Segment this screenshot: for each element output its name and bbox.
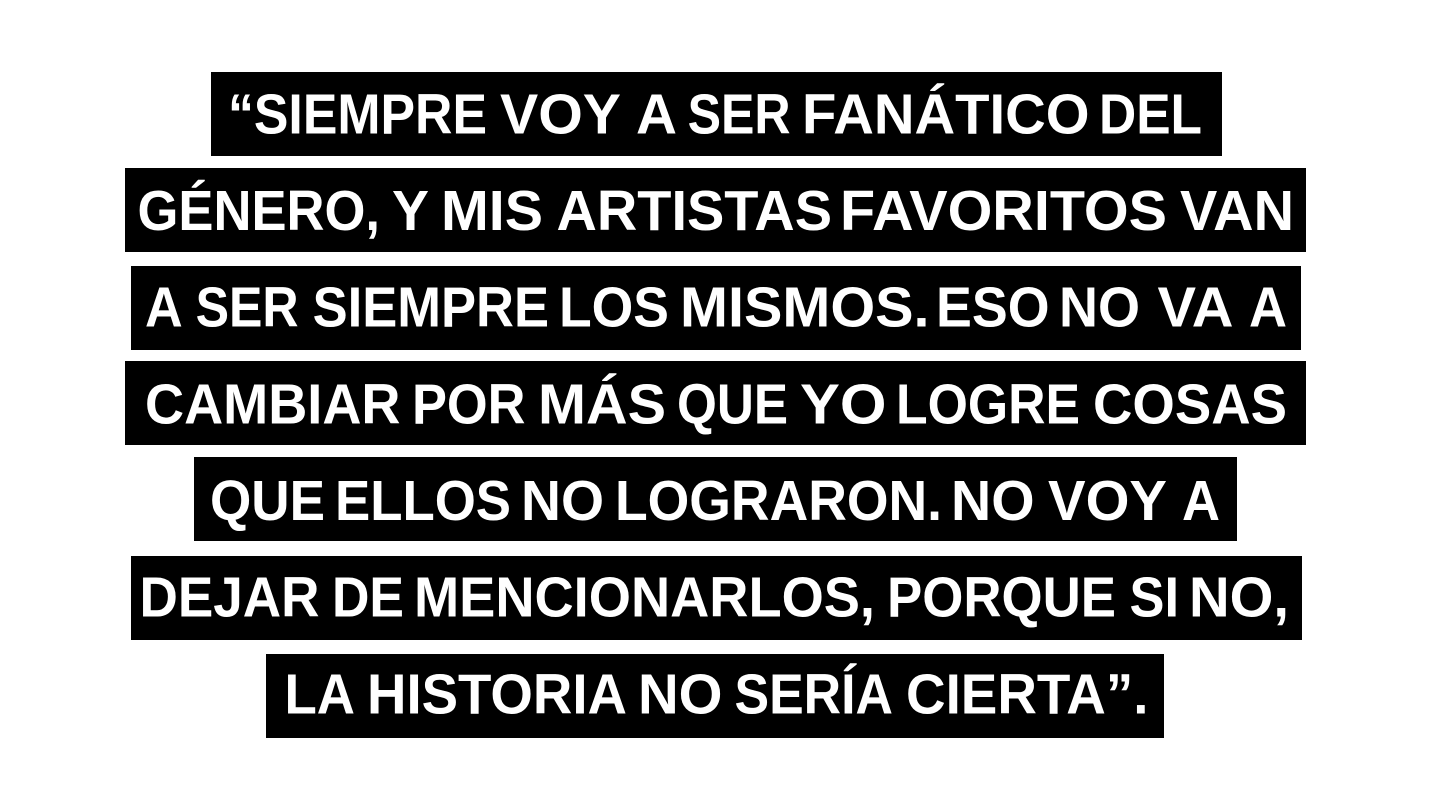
- quote line 6: PORQUE: [887, 566, 1116, 629]
- quote line 4: CAMBIAR: [145, 372, 400, 435]
- quote line 3: NO: [1059, 276, 1140, 339]
- quote line 3: LOS: [559, 276, 669, 339]
- quote line 2: Y: [392, 179, 429, 242]
- quote line 2: FAVORITOS: [840, 179, 1167, 242]
- quote line 7: HISTORIA: [367, 662, 627, 725]
- quote line 7: [266, 654, 1164, 738]
- quote line 6: NO,: [1189, 566, 1289, 629]
- quote line 3: SER: [196, 276, 299, 339]
- quote line 7: NO: [638, 662, 722, 725]
- quote line 7: CIERTA”.: [906, 662, 1148, 725]
- quote line 4: MÁS: [538, 372, 666, 435]
- quote line 3: VA: [1158, 276, 1234, 339]
- quote line 7: LA: [284, 662, 355, 725]
- quote line 4: COSAS: [1093, 372, 1287, 435]
- quote line 3: SIEMPRE: [313, 276, 549, 339]
- quote line 1: DEL: [1099, 82, 1202, 145]
- quote line 2: MIS: [441, 179, 543, 242]
- quote line 5: LOGRARON.: [615, 469, 942, 532]
- quote line 4: YO: [800, 372, 886, 435]
- quote line 5: NO: [521, 469, 604, 532]
- quote line 1: FANÁTICO: [802, 82, 1090, 145]
- quote line 4: LOGRE: [896, 372, 1080, 435]
- quote line 4: QUE: [677, 372, 788, 435]
- quote line 5: QUE: [210, 469, 325, 532]
- quote line 5: A: [1182, 469, 1220, 532]
- quote line 3: [131, 266, 1301, 350]
- quote line 4: POR: [412, 372, 526, 435]
- quote line 7: SERÍA: [734, 662, 893, 725]
- quote line 5: VOY: [1048, 469, 1167, 532]
- quote line 3: A: [1249, 276, 1287, 339]
- quote line 6: DE: [332, 566, 404, 629]
- quote line 5: [194, 457, 1237, 541]
- quote line 2: ARTISTAS: [556, 179, 832, 242]
- quote line 6: MENCIONARLOS,: [414, 566, 875, 629]
- quote line 5: ELLOS: [335, 469, 511, 532]
- quote line 4: [125, 361, 1306, 445]
- quote line 3: ESO: [936, 276, 1050, 339]
- quote line 2: GÉNERO,: [138, 179, 380, 242]
- quote line 2: [125, 168, 1306, 252]
- quote line 6: SI: [1130, 566, 1179, 629]
- quote line 1: A: [636, 82, 677, 145]
- quote line 2: VAN: [1180, 179, 1294, 242]
- quote line 3: MISMOS.: [680, 276, 930, 339]
- quote line 1: “SIEMPRE: [228, 82, 487, 145]
- quote line 6: [131, 556, 1302, 640]
- quote line 1: [211, 72, 1222, 156]
- quote line 3: A: [145, 276, 183, 339]
- quote line 6: DEJAR: [140, 566, 320, 629]
- quote line 1: VOY: [500, 82, 621, 145]
- quote line 5: NO: [951, 469, 1034, 532]
- quote line 1: SER: [688, 82, 791, 145]
